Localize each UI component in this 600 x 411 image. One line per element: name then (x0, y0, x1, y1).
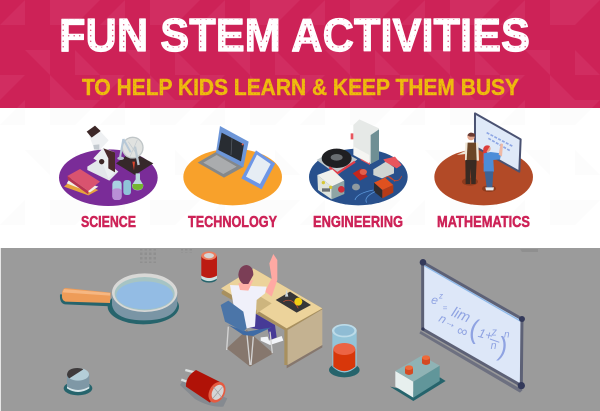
subtitle: TO HELP KIDS LEARN & KEEP THEM BUSY (82, 74, 519, 100)
header banner (0, 0, 600, 108)
icon: tablet (241, 150, 275, 189)
formula: n (504, 330, 510, 341)
icon: girl at board (482, 143, 503, 192)
formula: lim (449, 305, 473, 326)
panel: mathematics (434, 113, 533, 205)
icon: books (64, 169, 100, 195)
left floor illustrations (60, 251, 229, 407)
panel: technology (183, 126, 282, 205)
icon: whiteboard (475, 113, 521, 172)
formula: ) (496, 331, 507, 361)
icon: fallen red capacitor (180, 370, 229, 407)
formula: ∞ (455, 323, 469, 341)
panel: science (59, 126, 158, 206)
raised arm (265, 254, 277, 297)
floor shadow (227, 330, 273, 367)
formula: 1+ (477, 326, 494, 343)
icon: lab board and apparatus (116, 137, 153, 175)
chair (221, 301, 272, 365)
white STEM band (0, 108, 600, 248)
formula: z (438, 291, 443, 300)
formula: ( (469, 314, 480, 344)
label: mathematics: MATHEMATICS (437, 214, 530, 231)
formula: e (430, 293, 440, 308)
formula: n→ (437, 311, 460, 332)
icon: magnifying glass (60, 273, 179, 324)
shirt (230, 285, 267, 328)
icon: capacitor (352, 168, 368, 190)
legs and shoes (247, 313, 283, 345)
formula (430, 291, 510, 361)
formula: n (491, 340, 497, 352)
icon: control box (390, 355, 446, 401)
grey activity floor (0, 248, 600, 411)
label: science: SCIENCE (81, 214, 136, 231)
toy mat (276, 289, 311, 313)
neck and head (238, 265, 253, 291)
icon: beaker with red liquid (329, 324, 360, 377)
icon: fan unit (317, 148, 357, 175)
icon: microscope (87, 126, 118, 181)
icon: whiteboard with formula (419, 259, 525, 393)
icon: student at desk (221, 254, 322, 368)
icon: man teaching (457, 133, 479, 186)
label: technology: TECHNOLOGY (188, 214, 278, 231)
icon: battery and wires (355, 176, 402, 203)
desk (221, 268, 322, 368)
panel: engineering (309, 119, 408, 205)
label: engineering: ENGINEERING (313, 214, 403, 231)
formula: z (491, 327, 498, 339)
icon: standing red capacitor (201, 251, 217, 283)
icon: small grey box (373, 162, 394, 178)
icon: tall machine (351, 119, 379, 165)
icon: laptop (198, 126, 249, 178)
right floor illustrations (329, 259, 525, 401)
icon: red bracket (383, 157, 402, 168)
icon: robot control box (317, 169, 345, 199)
icon: knob component (64, 368, 92, 395)
icon: beakers and flask (112, 173, 143, 200)
title: FUN STEM ACTIVITIES (59, 9, 530, 61)
formula: = (443, 304, 448, 313)
